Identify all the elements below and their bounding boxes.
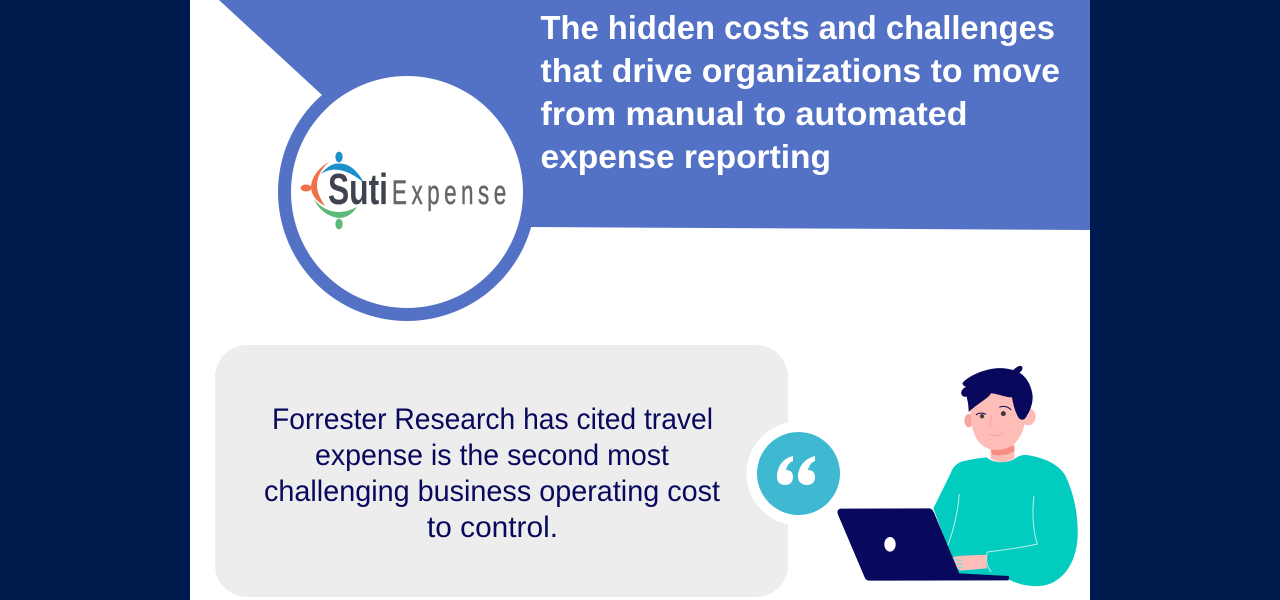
sweater fold lines bbox=[947, 494, 1037, 572]
title: that drive organizations to move bbox=[540, 52, 1060, 89]
title: expense reporting bbox=[540, 138, 831, 175]
logo icon: three figures bbox=[301, 152, 364, 229]
logo circle bbox=[278, 63, 536, 321]
logo: SutiExpense bbox=[301, 152, 506, 229]
quote text bbox=[264, 403, 721, 544]
title: from manual to automated bbox=[540, 95, 968, 132]
quote text: expense is the second most bbox=[315, 439, 670, 472]
laptop bbox=[837, 508, 1009, 581]
logo wordmark: Expense: Expense bbox=[392, 174, 506, 212]
laptop logo bbox=[884, 537, 896, 552]
quote text: to control. bbox=[427, 511, 558, 544]
neck bbox=[991, 443, 1014, 462]
hand bbox=[952, 555, 987, 571]
quote text: Forrester Research has cited travel bbox=[272, 403, 713, 436]
hair bbox=[961, 366, 1033, 420]
header banner bbox=[219, 0, 1090, 230]
illustration: person with laptop bbox=[837, 366, 1078, 586]
ears bbox=[964, 414, 973, 427]
icon: quotation mark badge bbox=[746, 422, 850, 526]
facial features bbox=[976, 406, 1011, 436]
finger lines bbox=[953, 559, 963, 569]
face bbox=[969, 393, 1025, 450]
title bbox=[540, 9, 1060, 175]
quote text: challenging business operating cost bbox=[264, 475, 721, 508]
title: The hidden costs and challenges bbox=[540, 9, 1055, 46]
logo wordmark: Suti: Suti bbox=[328, 165, 388, 214]
white content panel bbox=[190, 0, 1090, 600]
sweater bbox=[933, 455, 1078, 586]
quote bubble bbox=[215, 345, 788, 597]
